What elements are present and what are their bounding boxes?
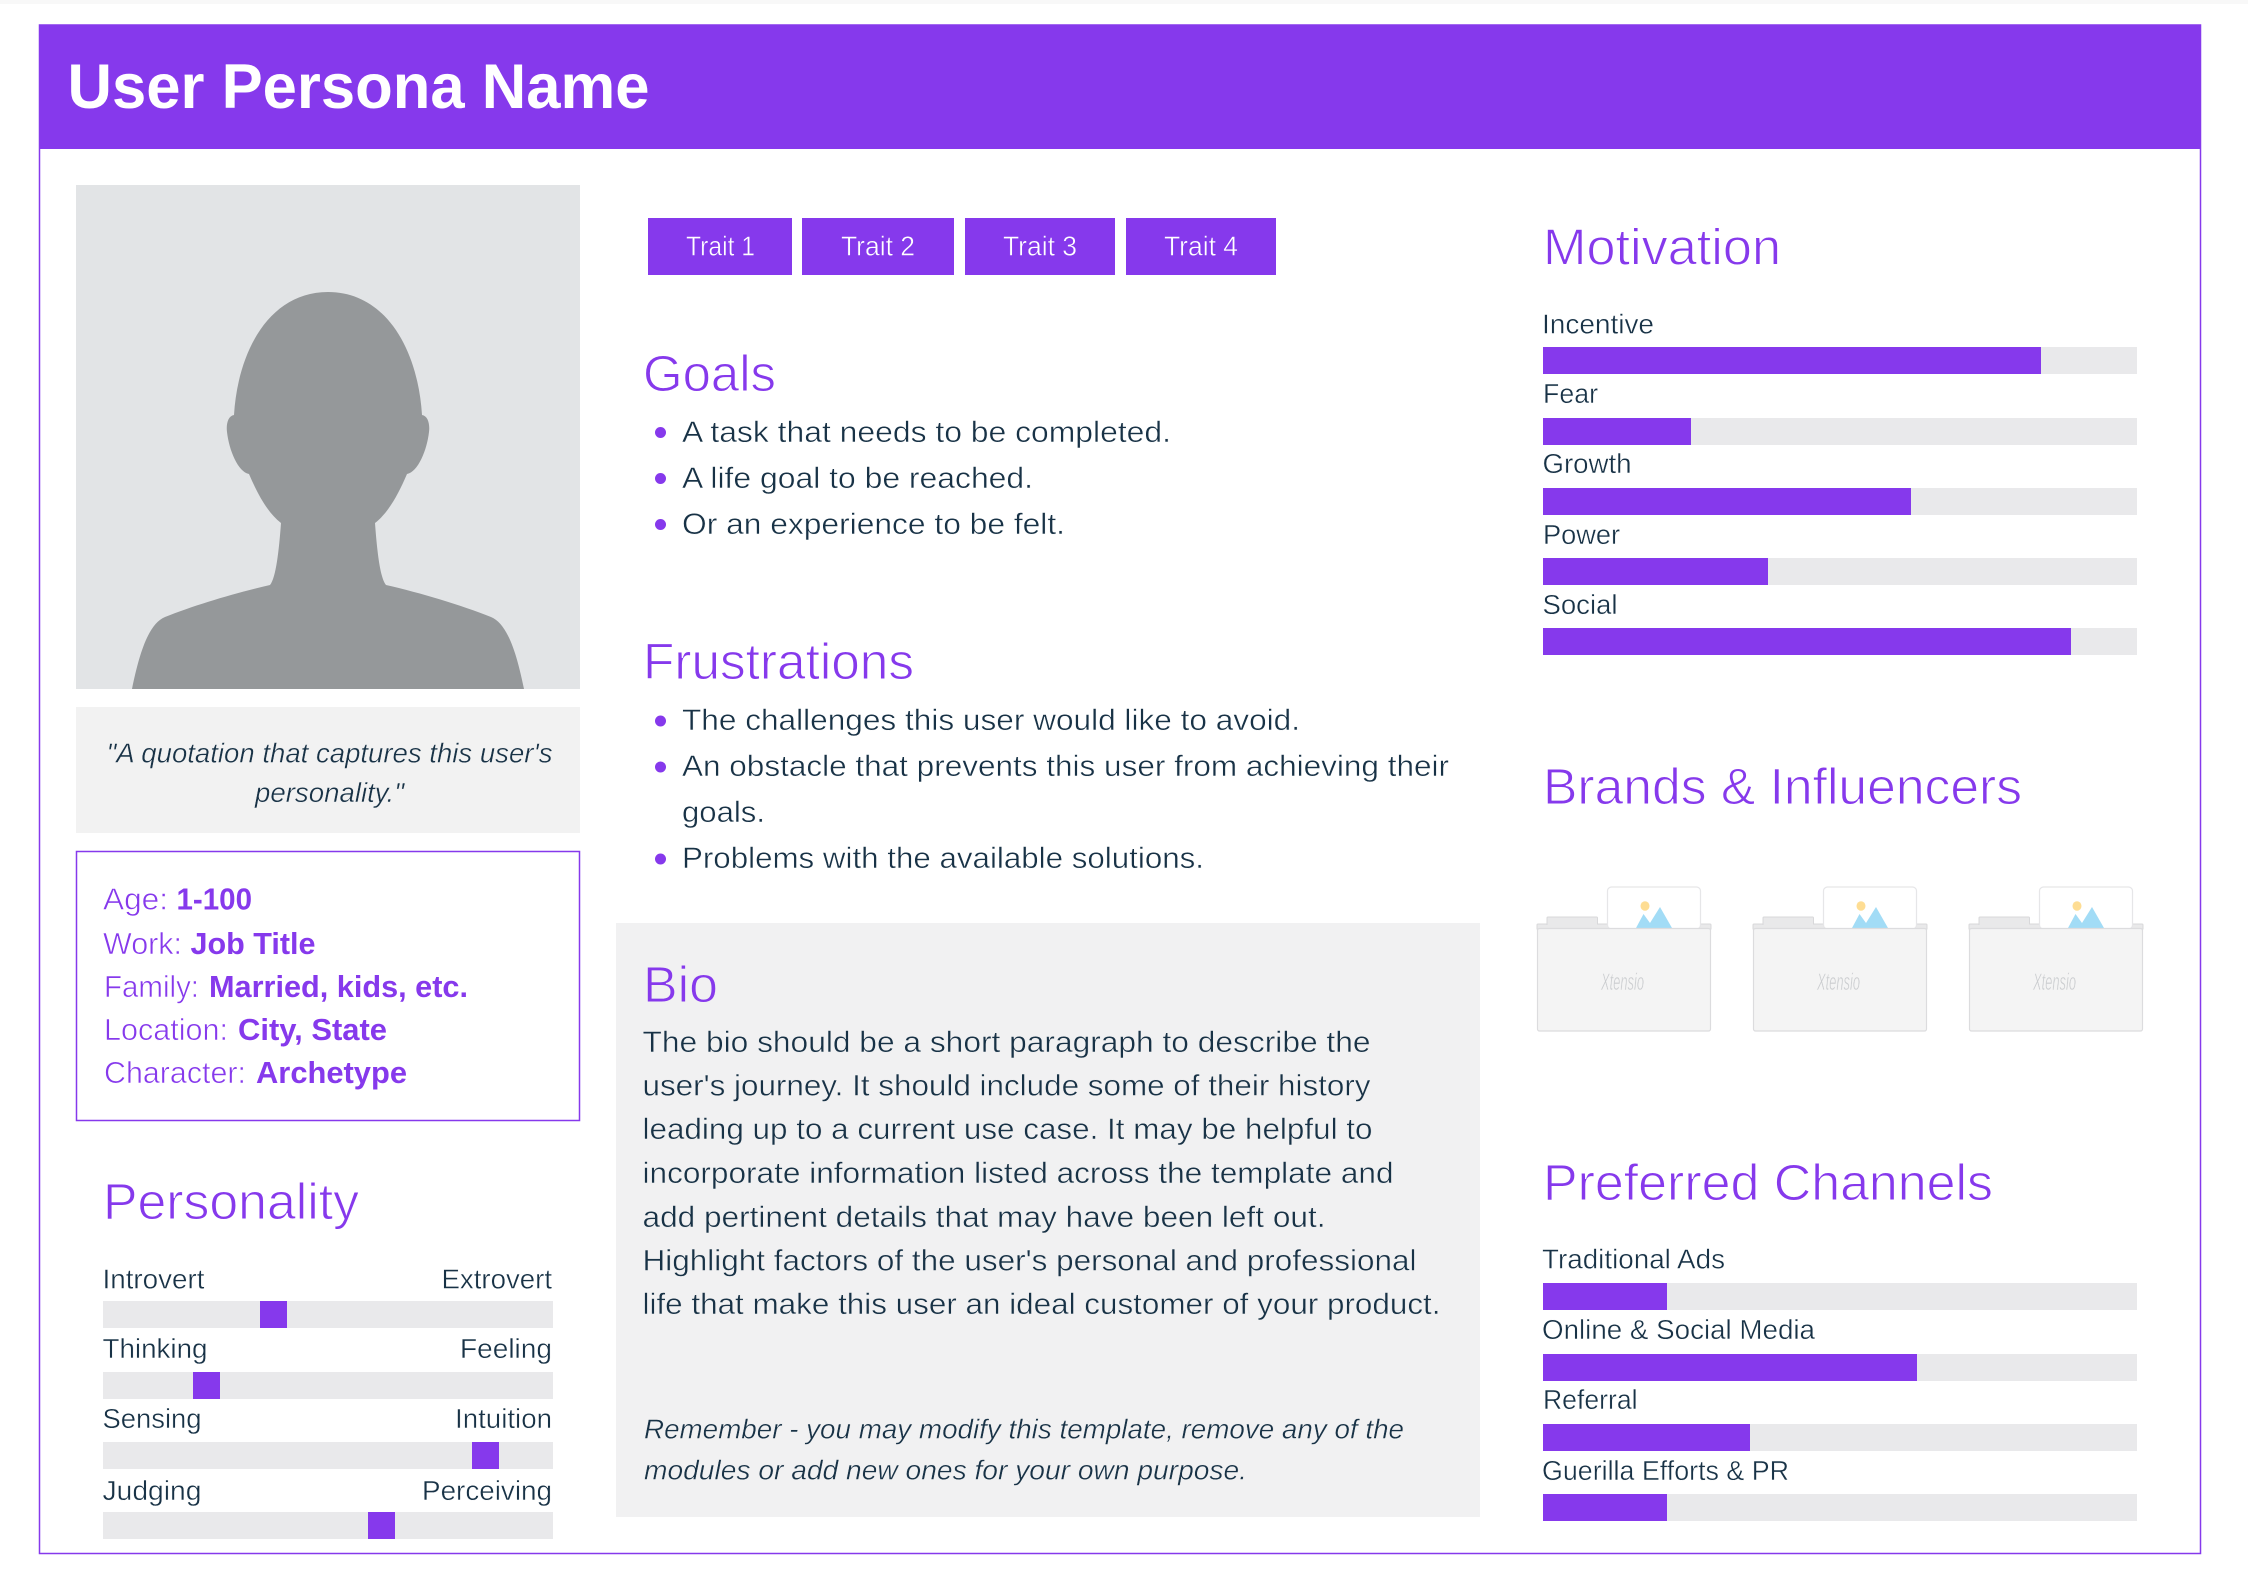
bio paragraph: life that make this user an ideal customer of your product. [642,1288,1440,1321]
bio note: modules or add new ones for your own purpose. [644,1454,1247,1486]
demographics panel [76,852,580,1120]
heading: preferred channels: Preferred Channels [1543,1154,1993,1211]
heading: bio: Bio [643,956,718,1013]
quote text: "A quotation that captures this user's [106,738,552,768]
panel: bio [616,923,1480,1517]
work: Work: [103,926,182,961]
panel: brands and influencers [1537,758,2143,1031]
slider: judging to perceiving: Perceiving [422,1475,552,1506]
bar: fear: Fear [1543,378,1598,409]
heading: personality: Personality [103,1173,359,1230]
slider: thinking to feeling [102,1333,553,1399]
bar: social [1542,589,2137,655]
location: Location: [104,1012,228,1047]
slider: sensing to intuition [102,1403,553,1469]
bio paragraph: The bio should be a short paragraph to describe the [642,1026,1370,1059]
tag: trait 2: Trait 2 [841,230,915,262]
tag: trait 3: Trait 3 [1003,230,1077,262]
bar: incentive: Incentive [1542,308,1654,340]
heading: goals: Goals [643,345,776,402]
bio paragraph: Highlight factors of the user's personal and professional [642,1244,1416,1278]
icon: image folder 3 [1969,887,2143,1031]
slider: introvert to extrovert [102,1264,553,1328]
tag: trait 1 [648,218,792,275]
bar: growth [1542,448,2137,515]
slider: sensing to intuition: Intuition [455,1403,552,1434]
heading: motivation: Motivation [1543,218,1781,276]
goals list: A task that needs to be completed. [682,416,1171,449]
tag: trait 3 [965,218,1115,275]
bio paragraph: add pertinent details that may have been left out. [642,1201,1326,1234]
icon: person silhouette [132,292,524,689]
heading: frustrations: Frustrations [643,633,914,690]
panel: personality [102,1173,553,1539]
bar: referral [1543,1384,2137,1451]
trait tags [648,218,1276,275]
bar: social: Social [1542,589,1618,620]
frustrations list: goals. [682,796,765,829]
frustrations list: Problems with the available solutions. [682,842,1204,875]
frustrations list [655,704,1449,875]
character: Character: [104,1055,246,1090]
work: Job Title [190,926,316,961]
bar: referral: Referral [1543,1384,1638,1415]
bar: traditional ads: Traditional Ads [1542,1244,1725,1274]
family: Family: [104,969,199,1004]
tag: trait 4: Trait 4 [1164,230,1238,262]
panel: goals [643,345,1171,541]
character: Archetype [256,1055,407,1090]
icon: image folder 2: Xtensio [1816,969,1860,996]
icon: image folder 2 [1753,887,1927,1031]
icon: image folder 1: Xtensio [1600,969,1644,996]
tag: trait 4 [1126,218,1276,275]
bar: online and social media [1542,1314,2137,1381]
age: 1-100 [176,882,252,916]
bar: incentive [1542,308,2137,374]
slider: sensing to intuition: Sensing [102,1403,202,1434]
frustrations list: An obstacle that prevents this user from achieving their [682,750,1449,783]
tag: trait 1: Trait 1 [686,230,755,262]
tag: trait 2 [802,218,954,275]
bar: power [1543,519,2137,585]
header banner [39,25,2201,149]
panel: preferred channels [1542,1154,2137,1521]
location: City, State [238,1012,387,1047]
goals list: Or an experience to be felt. [682,508,1065,541]
quote text: personality." [254,777,405,808]
bar: fear [1543,378,2137,445]
bar: guerilla efforts and pr [1542,1455,2137,1521]
icon: image folder 3: Xtensio [2032,969,2076,996]
slider: introvert to extrovert: Extrovert [442,1264,552,1294]
bio note: Remember - you may modify this template, remove any of the [644,1414,1404,1444]
bio paragraph: user's journey. It should include some of their history [642,1070,1370,1102]
panel: motivation [1542,218,2137,655]
quote text [106,738,552,808]
panel: frustrations [643,633,1449,875]
photo placeholder [76,185,580,689]
slider: judging to perceiving [102,1475,553,1539]
bio paragraph: incorporate information listed across the template and [642,1157,1394,1190]
slider: judging to perceiving: Judging [102,1475,202,1506]
bar: power: Power [1543,519,1620,550]
bar: traditional ads [1542,1244,2137,1310]
bar: online and social media: Online & Social Media [1542,1314,1815,1345]
quote panel [76,707,580,833]
bio paragraph [642,1026,1440,1321]
slider: thinking to feeling: Feeling [460,1333,552,1364]
location [104,1012,387,1047]
bar: growth: Growth [1542,448,1632,479]
goals list: A life goal to be reached. [682,462,1033,495]
work [103,926,316,961]
title: User Persona Name [68,52,650,122]
bio paragraph: leading up to a current use case. It may be helpful to [642,1113,1372,1146]
family: Married, kids, etc. [209,969,468,1004]
frustrations list: The challenges this user would like to avoid. [682,704,1300,737]
character [104,1055,407,1090]
age: Age: [103,882,168,916]
age [103,882,252,916]
bio note [644,1414,1404,1486]
icon: image folder 1 [1537,887,1711,1031]
heading: brands and influencers: Brands & Influencers [1543,758,2022,815]
bar: guerilla efforts and pr: Guerilla Efforts & PR [1542,1455,1789,1486]
slider: introvert to extrovert: Introvert [102,1264,205,1294]
slider: thinking to feeling: Thinking [102,1333,208,1364]
goals list [655,416,1171,541]
